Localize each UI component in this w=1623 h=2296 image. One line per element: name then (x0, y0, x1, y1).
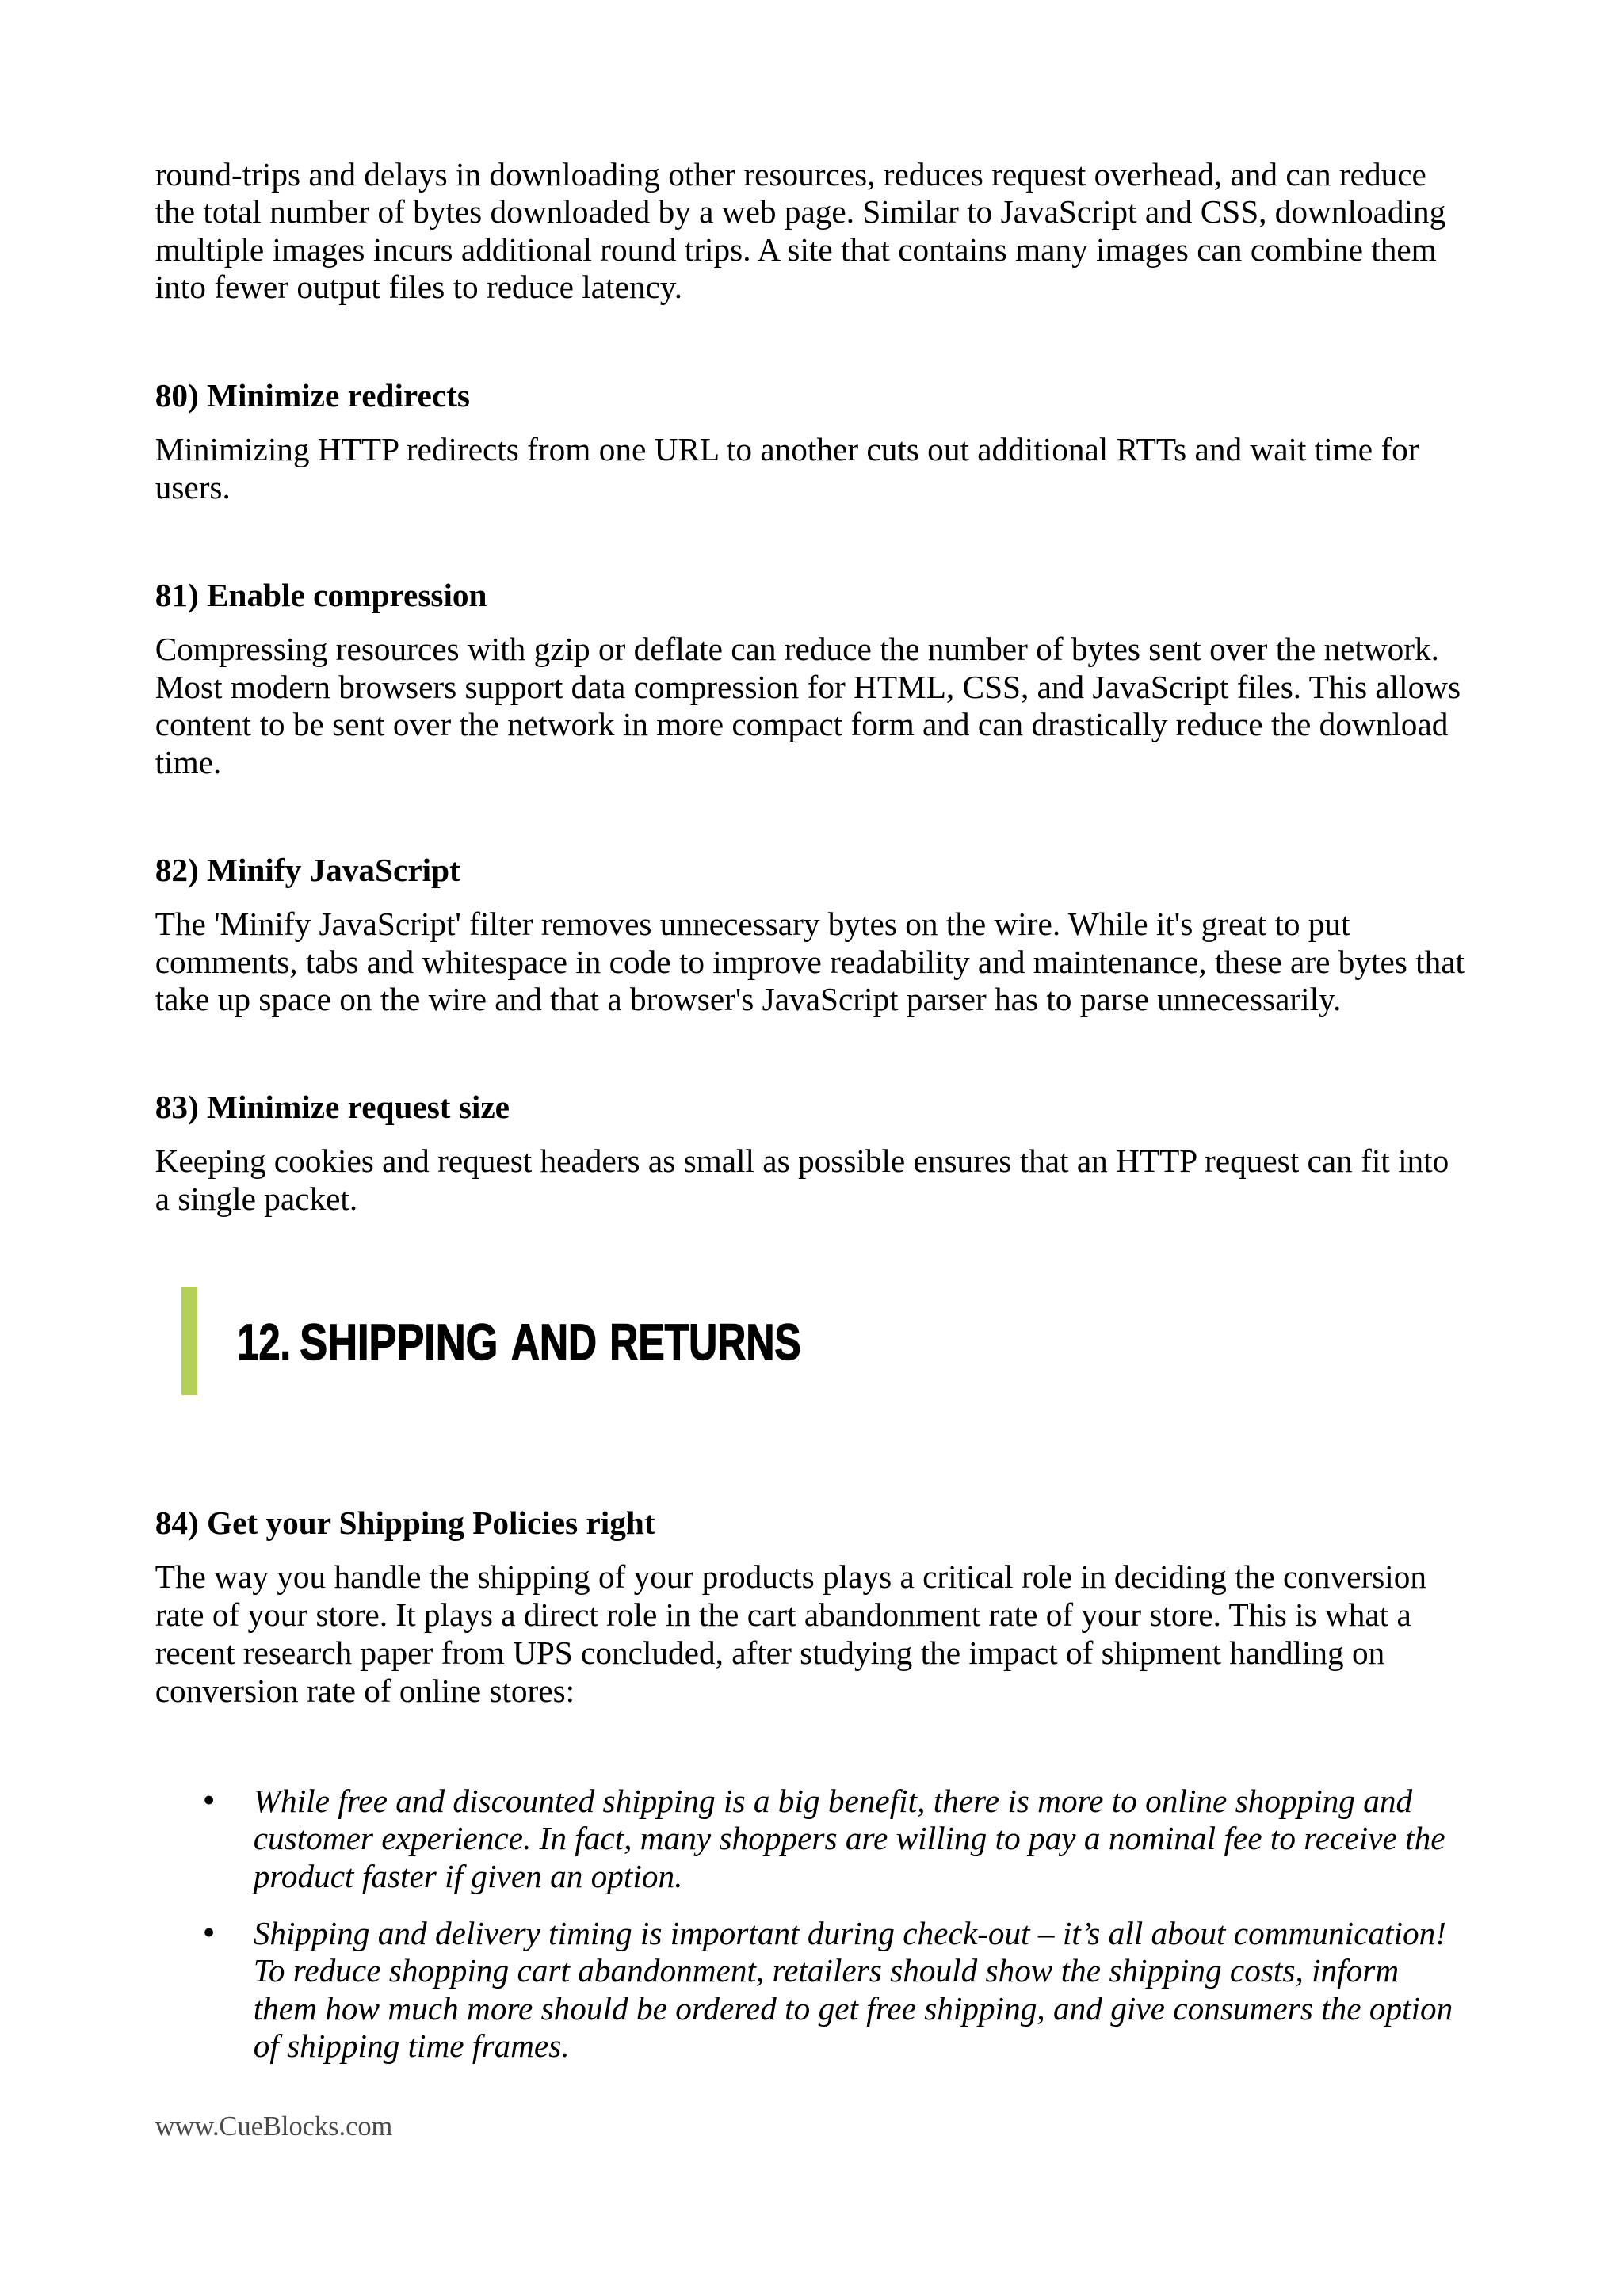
text block: image sprite conclusion (155, 155, 1445, 305)
text block: minimize redirects: Minimizing HTTP redirects from one URL to another cuts out additional RTTs and wait time for (155, 431, 1419, 467)
text block: image sprite conclusion: multiple images incurs additional round trips. A site that contains many images can combine them (155, 231, 1437, 268)
section title: 12. (238, 1314, 291, 1371)
bullet: shipping and delivery timing (203, 1913, 1453, 2064)
bullet: free and discounted shipping (203, 1780, 1445, 1894)
bullet: free and discounted shipping: product faster if given an option. (254, 1858, 682, 1894)
section title: AND (511, 1314, 597, 1371)
text block: shipping policies: conversion rate of online stores: (155, 1672, 575, 1709)
text block: minify javascript: comments, tabs and whitespace in code to improve readability and maintenance, these are bytes that (155, 944, 1465, 980)
section title (238, 1314, 801, 1371)
accent bar (181, 1287, 197, 1395)
heading: 83 minimize request size: 83) Minimize request size (155, 1089, 510, 1125)
text: • (203, 1913, 215, 1952)
text block: enable compression: Most modern browsers support data compression for HTML, CSS, and JavaScript files. This allows (155, 669, 1461, 705)
bullet: shipping and delivery timing: To reduce shopping cart abandonment, retailers should show the shipping costs, inform (254, 1952, 1399, 1989)
heading: 81 enable compression: 81) Enable compression (155, 577, 487, 613)
text block: minify javascript (155, 906, 1465, 1017)
text block: enable compression (155, 631, 1461, 780)
text block: minimize request size: Keeping cookies and request headers as small as possible ensures that an HTTP request can fit into (155, 1142, 1449, 1179)
text block: minify javascript: take up space on the wire and that a browser's JavaScript parser has to parse unnecessarily. (155, 981, 1341, 1017)
heading: 80 minimize redirects: 80) Minimize redirects (155, 377, 470, 414)
heading: 82 minify javascript: 82) Minify JavaScript (155, 852, 460, 888)
text block: minimize redirects: users. (155, 469, 231, 505)
text block: shipping policies: The way you handle the shipping of your products plays a critical role in deciding the conversion (155, 1558, 1426, 1595)
text block: image sprite conclusion: round-trips and delays in downloading other resources, reduces request overhead, and can reduce (155, 155, 1426, 192)
section title: RETURNS (609, 1314, 801, 1371)
text: • (203, 1780, 215, 1820)
text block: minimize redirects (155, 431, 1419, 505)
bullet: shipping and delivery timing: of shipping time frames. (254, 2027, 570, 2064)
text block: enable compression: Compressing resources with gzip or deflate can reduce the number of bytes sent over the network. (155, 631, 1439, 667)
bullet: free and discounted shipping: customer experience. In fact, many shoppers are willing to pay a nominal fee to receive the (254, 1820, 1445, 1856)
section title: SHIPPING (300, 1314, 498, 1371)
bullet: free and discounted shipping: While free and discounted shipping is a big benefit, there is more to online shopping and (254, 1783, 1412, 1819)
text block: shipping policies (155, 1558, 1426, 1709)
heading: 84 shipping policies: 84) Get your Shipping Policies right (155, 1505, 655, 1541)
footer: website: www.CueBlocks.com (155, 2111, 392, 2142)
text block: shipping policies: rate of your store. It plays a direct role in the cart abandonment rate of your store. This is what a (155, 1596, 1411, 1633)
text block: enable compression: content to be sent over the network in more compact form and can drastically reduce the download (155, 706, 1448, 742)
bullet: shipping and delivery timing: them how much more should be ordered to get free shipping, and give consumers the option (254, 1990, 1453, 2027)
text block: minimize request size (155, 1142, 1449, 1217)
text block: image sprite conclusion: the total number of bytes downloaded by a web page. Similar to JavaScript and CSS, downloading (155, 193, 1445, 230)
text block: minimize request size: a single packet. (155, 1180, 357, 1217)
text block: image sprite conclusion: into fewer output files to reduce latency. (155, 269, 682, 305)
bullet: shipping and delivery timing: Shipping and delivery timing is important during check-out – it’s all about communication! (254, 1915, 1446, 1951)
text block: shipping policies: recent research paper from UPS concluded, after studying the impact of shipment handling on (155, 1634, 1384, 1671)
text block: minify javascript: The 'Minify JavaScript' filter removes unnecessary bytes on the wire. While it's great to put (155, 906, 1350, 942)
text block: enable compression: time. (155, 744, 221, 780)
